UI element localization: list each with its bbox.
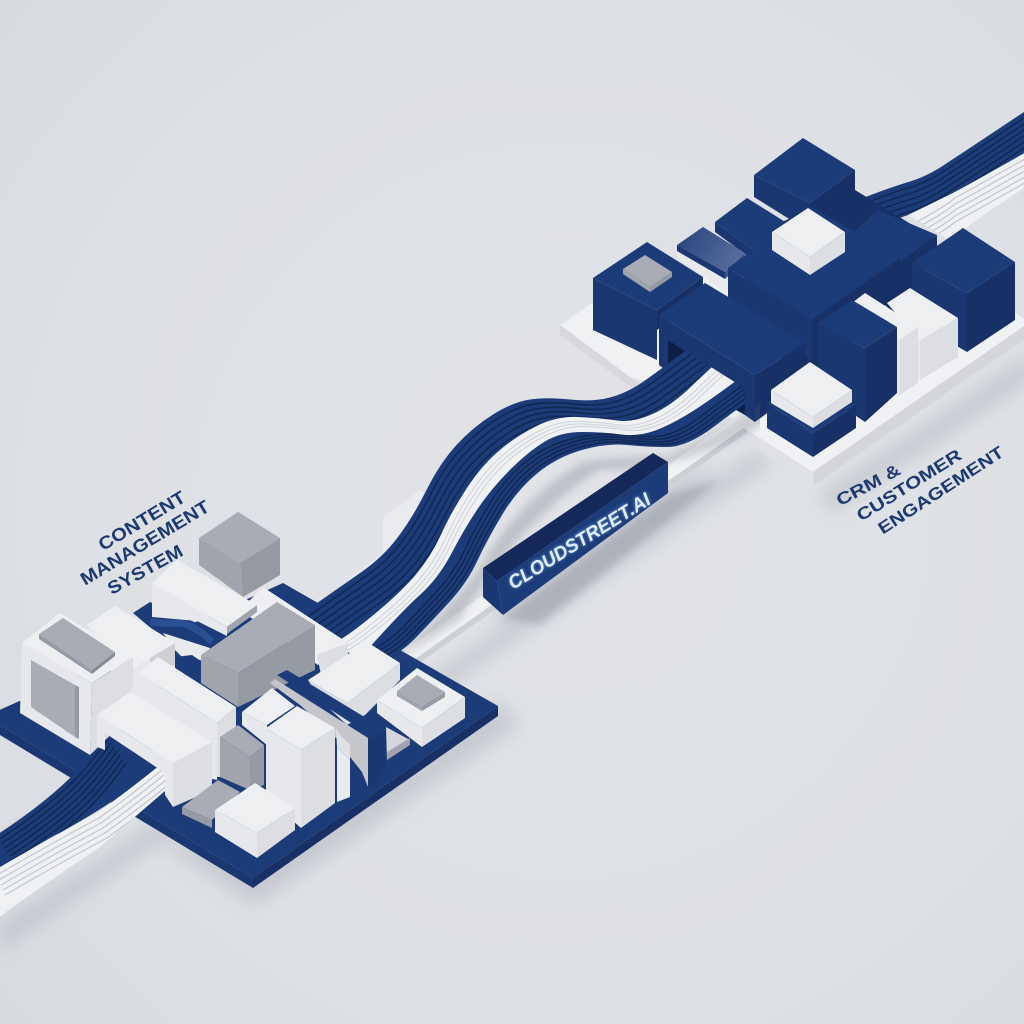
block: tall white [266, 706, 335, 828]
heading: CRM & Customer Engagement: CRM & [833, 460, 904, 510]
heading: CRM & Customer Engagement [833, 442, 1008, 538]
block: small white [242, 688, 295, 745]
block: white fin pieces [336, 728, 350, 802]
heading: CRM & Customer Engagement: ENGAGEMENT [875, 442, 1008, 538]
label box: CLOUDSTREET.AI [483, 453, 720, 625]
panel: right platform (CRM base) [560, 270, 1024, 485]
block: white long block [152, 560, 257, 636]
block: small navy base with white cube [767, 362, 856, 457]
heading: Content Management System: CONTENT [95, 487, 189, 555]
navy underlay mass [740, 190, 937, 375]
block: rear white base [240, 587, 348, 680]
heading: CRM & Customer Engagement: CUSTOMER [853, 445, 965, 525]
gray roof plate [39, 618, 115, 670]
icon: tilted screen panel [677, 227, 745, 292]
panel: left platform (CMS base) [0, 583, 498, 888]
white cables [342, 368, 734, 653]
cable shadow [402, 403, 760, 655]
block: back navy cube [754, 138, 855, 232]
block: gray rail and plate [270, 679, 368, 787]
label text: CLOUDSTREET.AI [505, 489, 655, 594]
white cable grooves [346, 370, 724, 650]
block: white base with gray cap [377, 668, 465, 747]
block: inner navy well with ribbon [133, 602, 225, 682]
panel: CMS building cluster [20, 512, 465, 858]
bridge right pillar [745, 375, 755, 422]
navy cables [318, 351, 756, 650]
block: low gray step [386, 727, 410, 760]
block: white slab right [308, 642, 400, 725]
block: front white cube [215, 783, 295, 858]
block: white cube on top [772, 208, 845, 275]
block: white block behind cube [87, 606, 175, 700]
block: large white cube with gray panels [20, 613, 133, 755]
gray wall plate [31, 660, 75, 737]
block: navy channel strip [277, 670, 386, 806]
block: right-back navy flat [850, 210, 937, 282]
block: white mid long [120, 657, 236, 780]
block: white slabs [848, 288, 958, 395]
cable bundle: lower left [0, 735, 172, 920]
block: big gray block [201, 602, 315, 707]
block: back-left navy flat [715, 198, 790, 260]
block: right navy cube [912, 228, 1015, 352]
heading: Content Management System: SYSTEM [104, 541, 186, 599]
block: white bridge over cables [97, 692, 212, 807]
label glow: CLOUDSTREET.AI [505, 489, 655, 594]
block: tall navy [818, 300, 897, 422]
heading: Content Management System [77, 487, 213, 599]
block: navy bridge over cables [659, 283, 805, 422]
navy cable grooves [304, 344, 767, 657]
block: gray back cube [199, 512, 280, 597]
block: central navy base [728, 207, 900, 370]
heading: Content Management System: MANAGEMENT [77, 496, 213, 589]
block: gray flat [182, 780, 240, 828]
cable bundle: upper right [866, 112, 1024, 238]
panel: CRM building cluster [593, 138, 1015, 422]
block: gray mid [220, 725, 264, 790]
block: left navy cube with gray cap [593, 242, 703, 360]
cable bundle: central flowing ribbon [308, 351, 760, 655]
soft ground shadows [0, 355, 1024, 950]
connector road: white strip between systems [340, 404, 755, 673]
